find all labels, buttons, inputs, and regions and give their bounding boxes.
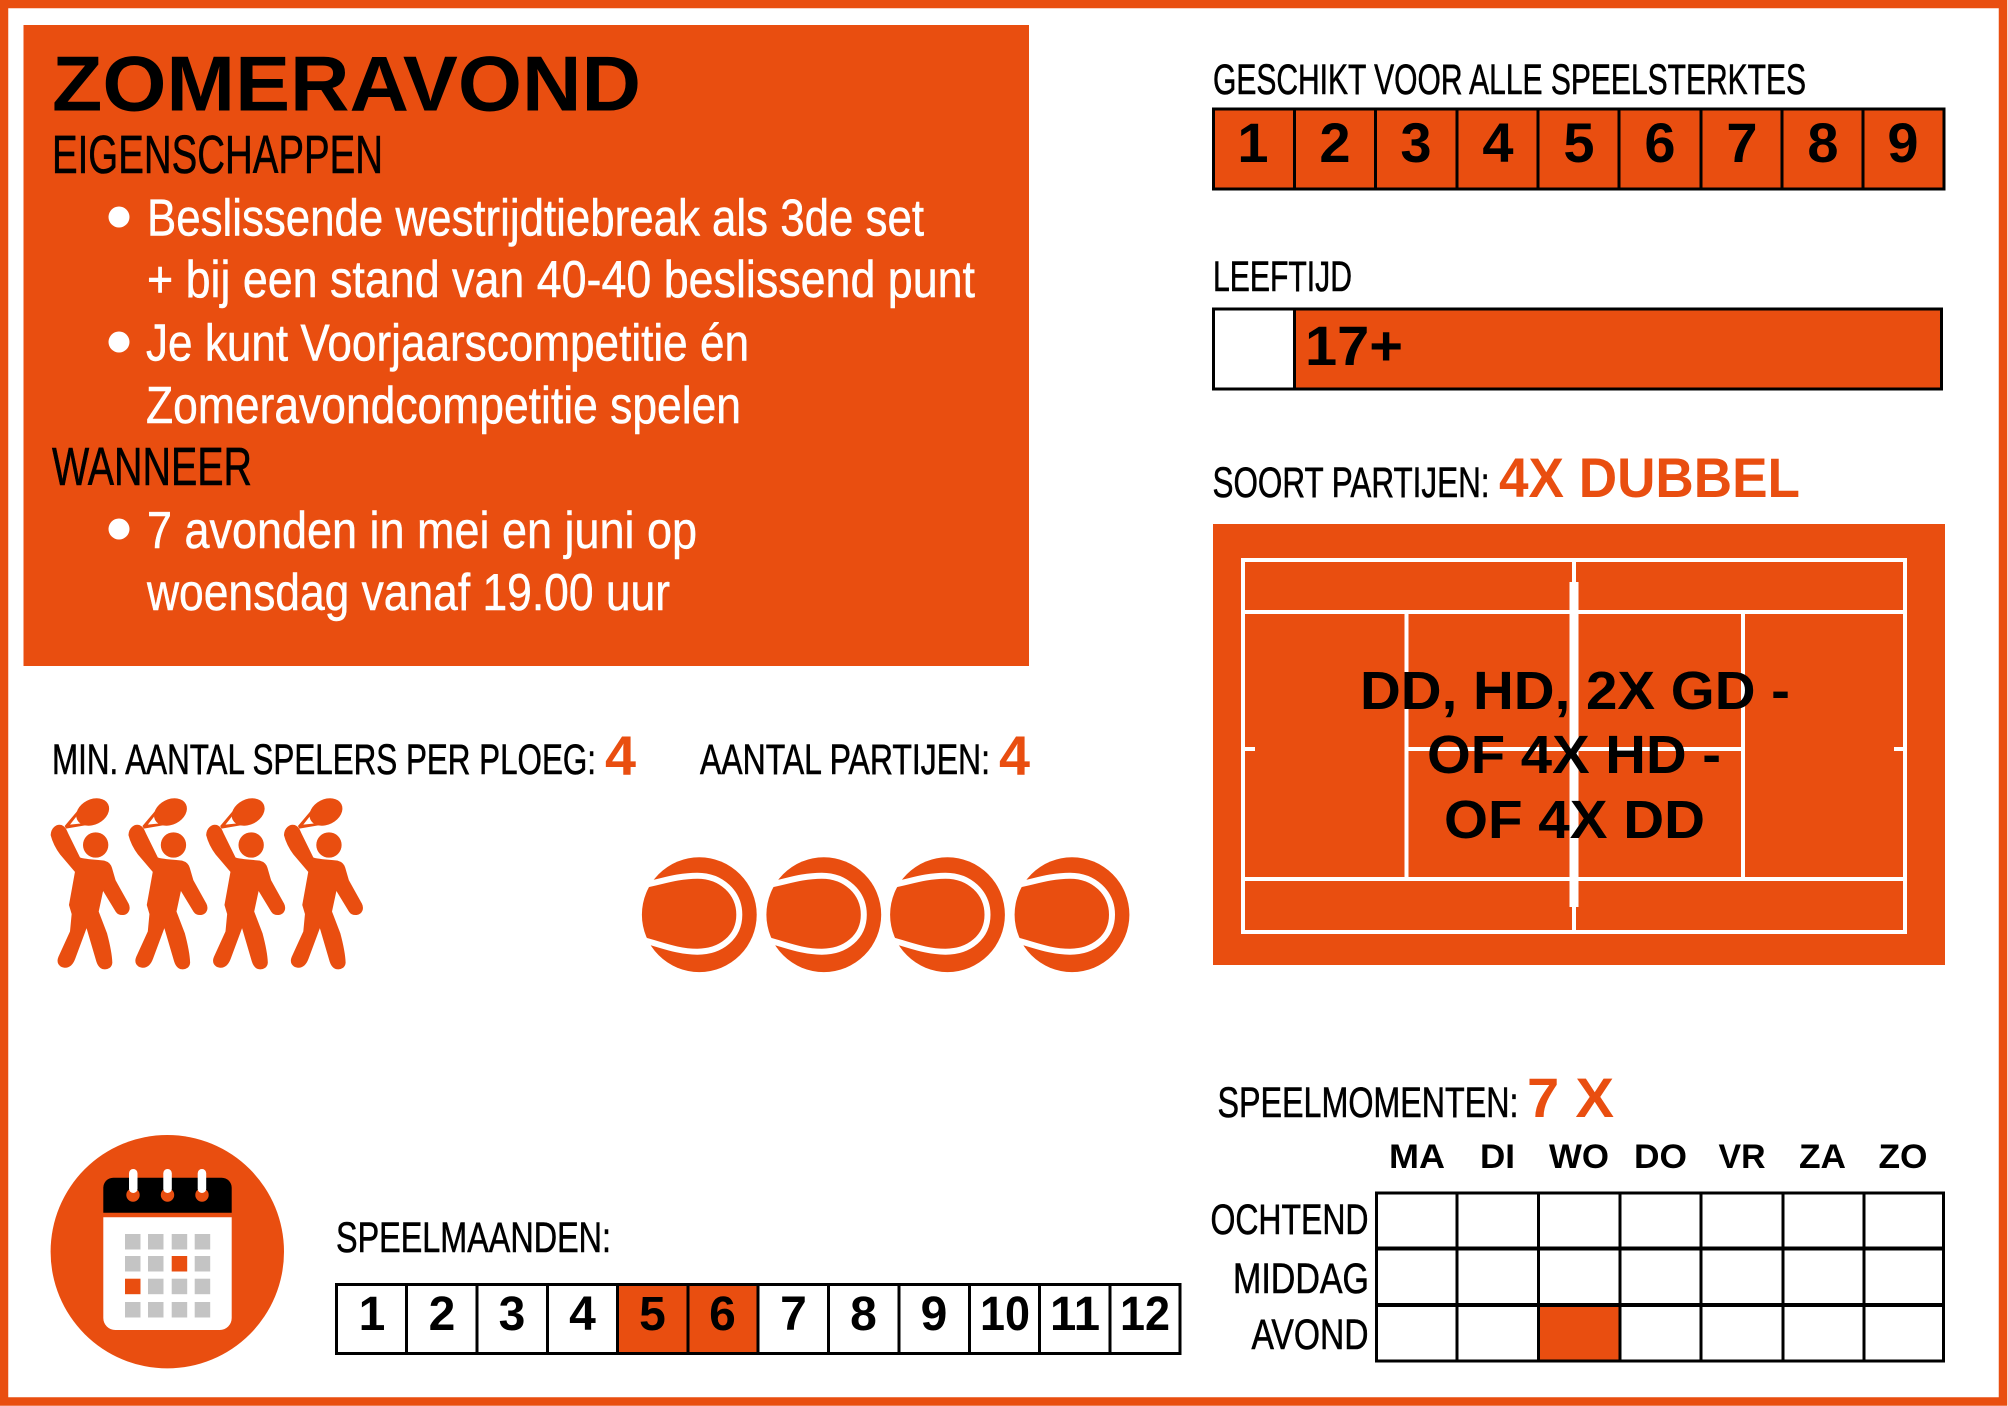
bullet list: eigenschappen xyxy=(108,190,975,435)
label: minimum players per team: MIN. AANTAL SPELERS PER PLOEG: xyxy=(52,736,596,784)
scale: playing strength 1-9: 4 xyxy=(1482,111,1514,174)
day headers: WO xyxy=(1549,1138,1609,1176)
row labels: MIDDAG xyxy=(1233,1255,1369,1303)
scale: months 1-12: 5 xyxy=(639,1288,666,1341)
bullet list: eigenschappen: Beslissende westrijdtiebreak als 3de set xyxy=(147,190,924,248)
bullet list: eigenschappen: + bij een stand van 40-40 beslissend punt xyxy=(147,251,975,309)
bullet list: wanneer: 7 avonden in mei en juni op xyxy=(147,502,697,560)
label: playing moments: SPEELMOMENTEN: xyxy=(1218,1079,1518,1127)
scale: months 1-12: 9 xyxy=(921,1288,947,1341)
panel: zomeravond description xyxy=(24,25,1029,666)
scale: playing strength 1-9: 9 xyxy=(1887,111,1919,174)
heading: wanneer: WANNEER xyxy=(52,437,252,497)
day headers: DO xyxy=(1634,1138,1687,1176)
scale: months 1-12: 1 xyxy=(359,1288,385,1341)
scale: months 1-12: 11 xyxy=(1050,1288,1100,1341)
scale: months 1-12 xyxy=(336,1284,1180,1354)
day headers xyxy=(1389,1138,1928,1176)
label: minimum players per team xyxy=(52,724,636,787)
row labels: AVOND xyxy=(1252,1311,1368,1359)
panel: tennis court xyxy=(1213,524,1945,965)
text: match combinations xyxy=(1360,661,1790,850)
text: match combinations: OF 4X HD - xyxy=(1427,725,1721,785)
icon: four tennis players xyxy=(52,793,362,968)
day headers: DI xyxy=(1480,1138,1515,1176)
label: number of matches: AANTAL PARTIJEN: xyxy=(700,736,990,784)
label: number of matches xyxy=(700,724,1030,787)
day headers: MA xyxy=(1389,1138,1445,1176)
bullet list: eigenschappen: Je kunt Voorjaarscompetitie én xyxy=(146,314,749,372)
label: match type xyxy=(1212,446,1800,509)
scale: months 1-12: 6 xyxy=(709,1288,736,1341)
label: playing moments: 7 X xyxy=(1527,1066,1614,1129)
court lines xyxy=(1243,560,1905,932)
heading: eigenschappen: EIGENSCHAPPEN xyxy=(52,125,383,185)
icon: four tennis balls xyxy=(642,857,1129,972)
scale: playing strength 1-9: 3 xyxy=(1400,111,1432,174)
scale: playing strength 1-9: 8 xyxy=(1807,111,1839,174)
scale: playing strength 1-9: 7 xyxy=(1726,111,1758,174)
label: match type: 4X DUBBEL xyxy=(1499,446,1800,509)
day headers: ZA xyxy=(1799,1138,1846,1176)
label: number of matches: 4 xyxy=(999,724,1030,787)
bullet list: eigenschappen: Zomeravondcompetitie spelen xyxy=(146,377,741,435)
scale: months 1-12: 10 xyxy=(980,1288,1030,1341)
scale: months 1-12: 8 xyxy=(850,1288,877,1341)
scale: playing strength 1-9: 2 xyxy=(1319,111,1351,174)
label: minimum players per team: 4 xyxy=(605,724,636,787)
schedule grid xyxy=(1376,1193,1944,1361)
scale: playing strength 1-9: 6 xyxy=(1644,111,1676,174)
scale: age 17+ xyxy=(1214,309,1942,389)
day headers: VR xyxy=(1718,1138,1766,1176)
label: match type: SOORT PARTIJEN: xyxy=(1212,459,1490,507)
icon: calendar xyxy=(51,1135,284,1368)
bullet list: wanneer xyxy=(108,502,697,622)
scale: months 1-12: 12 xyxy=(1120,1288,1170,1341)
scale: months 1-12: 7 xyxy=(780,1288,807,1341)
day headers: ZO xyxy=(1878,1138,1928,1176)
row labels xyxy=(1210,1196,1369,1359)
text: match combinations: DD, HD, 2X GD - xyxy=(1360,661,1790,721)
title: ZOMERAVOND xyxy=(52,40,641,128)
label: playing months: SPEELMAANDEN: xyxy=(336,1214,611,1262)
row labels: OCHTEND xyxy=(1210,1196,1368,1244)
scale: playing strength 1-9 xyxy=(1214,109,1944,189)
scale: age 17+: 17+ xyxy=(1305,314,1403,377)
scale: months 1-12: 4 xyxy=(569,1288,596,1341)
label: age: LEEFTIJD xyxy=(1213,253,1352,301)
text: match combinations: OF 4X DD xyxy=(1444,790,1705,850)
bullet list: wanneer: woensdag vanaf 19.00 uur xyxy=(146,564,670,622)
scale: months 1-12: 3 xyxy=(499,1288,525,1341)
scale: months 1-12: 2 xyxy=(429,1288,455,1341)
scale: playing strength 1-9: 5 xyxy=(1563,111,1595,174)
scale: playing strength 1-9: 1 xyxy=(1237,111,1269,174)
